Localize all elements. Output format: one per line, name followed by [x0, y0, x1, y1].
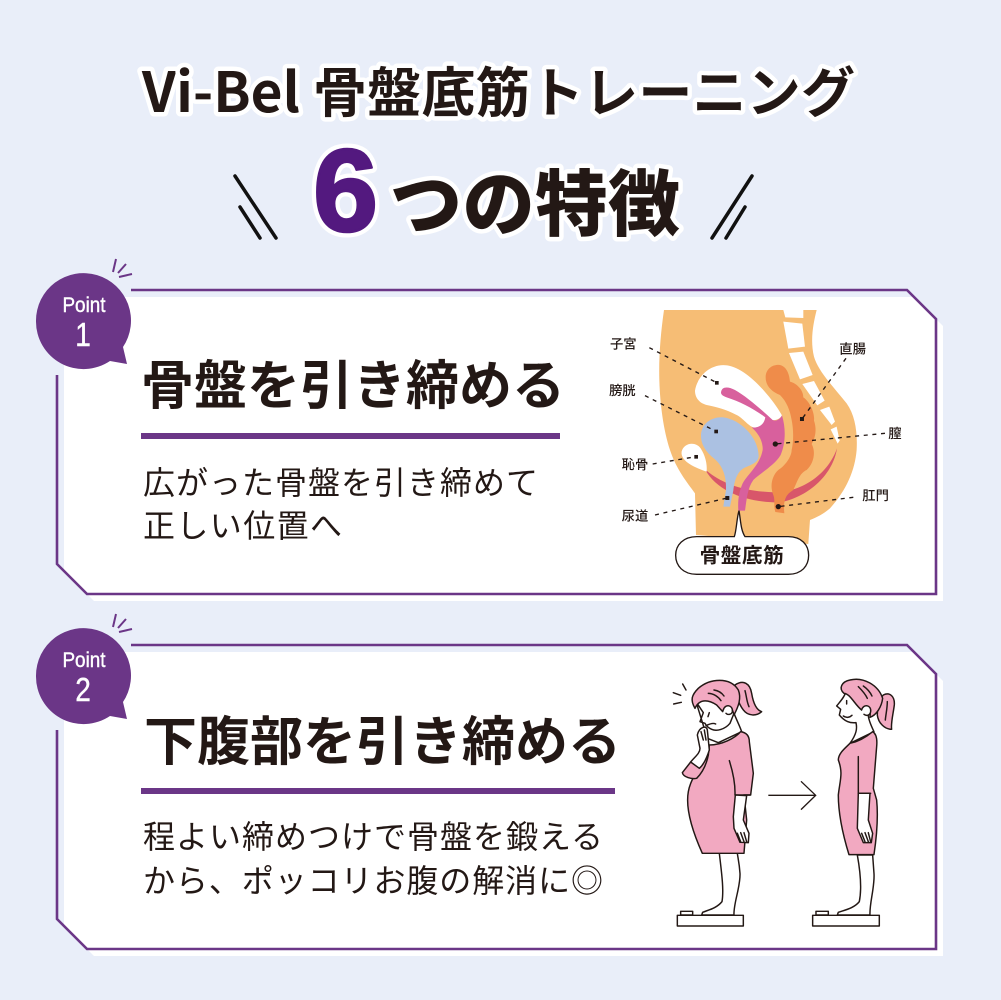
badge: Point 1: Point	[62, 294, 106, 317]
hair	[692, 680, 740, 715]
ponytail	[877, 694, 894, 729]
subtitle: 6つの特徴: 6	[313, 125, 378, 256]
leader lines and labels: 恥骨	[622, 454, 648, 473]
leader lines and labels: 直腸	[839, 338, 866, 357]
heading: point 1: 骨盤を引き締める	[141, 344, 565, 420]
body text: point 2	[143, 812, 603, 902]
badge: Point 2: Point	[62, 649, 106, 672]
rectum	[766, 365, 816, 513]
raised arm sleeve and hand	[682, 755, 708, 779]
badge: Point 2	[36, 614, 132, 724]
body text: point 1: 広がった骨盤を引き締めて	[143, 458, 538, 504]
dress	[688, 732, 753, 853]
pubic bone	[682, 444, 707, 472]
scale	[681, 911, 693, 915]
body text: point 1: 正しい位置へ	[143, 501, 342, 547]
title: Vi-Bel	[141, 48, 300, 128]
leader lines and labels: 肛門	[862, 485, 889, 504]
legs	[837, 855, 874, 915]
neck and face	[837, 690, 874, 743]
bladder	[701, 417, 759, 507]
panel: point 1	[36, 259, 943, 601]
badge: Point 1	[36, 259, 132, 369]
leader lines and labels: 尿道	[622, 505, 648, 524]
neck and face	[696, 702, 742, 743]
arrow	[768, 781, 816, 810]
figure: before, pregnant-looking belly	[673, 680, 762, 926]
scale	[816, 911, 828, 915]
heading: point 2: 下腹部を引き締める	[144, 700, 621, 776]
decoration: right slashes	[712, 176, 752, 238]
subtitle: 6つの特徴	[313, 125, 680, 256]
figure: after, slim	[813, 679, 894, 926]
dress	[838, 732, 877, 855]
leader lines and labels	[609, 333, 902, 524]
decoration: left slashes	[235, 176, 276, 238]
leader lines and labels: 子宮	[610, 333, 637, 352]
ponytail	[735, 682, 762, 715]
badge: Point 2: 2	[75, 672, 91, 709]
vagina and uterus	[721, 388, 785, 511]
body text: point 2: から、ポッコリお腹の解消に◎	[143, 856, 603, 902]
pelvic floor muscle	[705, 448, 837, 502]
lower arm	[733, 795, 749, 843]
diagram: pelvic anatomy	[609, 310, 902, 574]
subtitle: 6つの特徴: つの特徴	[390, 146, 680, 251]
panel: point 2	[36, 614, 943, 956]
title: 骨盤底筋トレーニング	[313, 49, 855, 128]
body text: point 2: 程よい締めつけで骨盤を鍛える	[143, 812, 603, 858]
illustration: before and after	[673, 679, 894, 926]
badge: Point 1: 1	[75, 317, 91, 354]
hair	[841, 679, 883, 717]
body silhouette	[659, 310, 857, 544]
lower arm	[857, 793, 873, 843]
leader lines and labels: 膣	[888, 423, 902, 442]
vertebrae	[783, 310, 840, 444]
subtitle: 6つの特徴: 6	[313, 125, 378, 256]
legs	[702, 853, 740, 915]
callout: 骨盤底筋	[676, 511, 809, 574]
callout: 骨盤底筋: 骨盤底筋	[700, 539, 784, 569]
uterus cavity	[695, 365, 782, 427]
leader lines and labels: 膀胱	[609, 380, 636, 399]
body text: point 1	[143, 458, 538, 547]
